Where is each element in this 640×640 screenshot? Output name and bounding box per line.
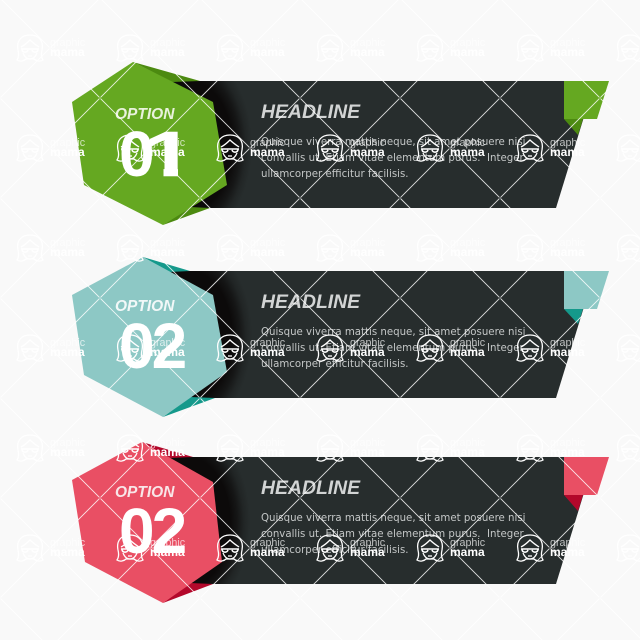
banner 3 bottom fold: [163, 583, 213, 603]
watermark overlay: graphic: [50, 137, 86, 149]
watermark overlay: mama: [50, 545, 85, 559]
banner 1 corner flag: [564, 81, 609, 119]
banner 2 number: 02: [119, 310, 186, 382]
banner 3: red option 02: [72, 442, 609, 603]
watermark overlay: mama: [350, 345, 385, 359]
banner 2 option label: OPTION: [115, 298, 175, 315]
banner 1 body text: convallis ut. Etiam vitae elementum purus. Integer: [261, 153, 524, 164]
banner 1 bottom fold: [163, 207, 210, 225]
banner 3 top fold: [142, 442, 193, 458]
watermark overlay: graphic: [550, 337, 586, 349]
banner 3 flag fold: [564, 495, 583, 511]
watermark overlay: graphic: [450, 237, 486, 249]
watermark overlay: mama: [350, 145, 385, 159]
watermark overlay: graphic: [450, 37, 486, 49]
watermark overlay: graphic: [50, 37, 86, 49]
watermark overlay: graphic: [250, 137, 286, 149]
watermark overlay: graphic: [350, 537, 386, 549]
banner 3 headline: HEADLINE: [261, 477, 361, 499]
watermark overlay: mama: [350, 545, 385, 559]
banner 1 body text: Quisque viverra mattis neque, sit amet posuere nisi: [261, 137, 525, 148]
banner 3 option label: OPTION: [115, 484, 175, 501]
watermark overlay: mama: [50, 445, 85, 459]
watermark overlay: mama: [250, 545, 285, 559]
watermark overlay: mama: [150, 145, 185, 159]
banner 1 flag fold: [564, 119, 583, 135]
watermark overlay: mama: [50, 45, 85, 59]
watermark overlay: mama: [350, 245, 385, 259]
watermark overlay: mama: [150, 545, 185, 559]
watermark overlay: mama: [450, 345, 485, 359]
watermark overlay: graphic: [450, 337, 486, 349]
watermark overlay: graphic: [150, 237, 186, 249]
banner 3 body text: Quisque viverra mattis neque, sit amet posuere nisi: [261, 513, 525, 524]
watermark overlay: mama: [550, 45, 585, 59]
banner 2: teal option 02: [72, 257, 609, 417]
watermark overlay: mama: [250, 445, 285, 459]
watermark overlay: mama: [250, 245, 285, 259]
watermark overlay: graphic: [150, 537, 186, 549]
banner 1 body text: [261, 137, 525, 180]
banner 1 dark panel: [170, 81, 595, 208]
banner 2 corner flag: [564, 271, 609, 309]
watermark overlay: mama: [50, 245, 85, 259]
banner 1 hexagon: [72, 62, 227, 225]
banner 1 hexagon shadow: [174, 81, 246, 208]
watermark overlay: graphic: [50, 237, 86, 249]
watermark overlay: mama: [250, 145, 285, 159]
watermark overlay: graphic: [350, 137, 386, 149]
watermark overlay: graphic: [350, 37, 386, 49]
watermark overlay: mama: [250, 345, 285, 359]
watermark overlay: graphic: [50, 537, 86, 549]
banner 1: green option 01: [72, 62, 609, 225]
watermark overlay: mama: [450, 145, 485, 159]
watermark overlay: mama: [550, 145, 585, 159]
watermark overlay: graphic: [450, 137, 486, 149]
watermark overlay: mama: [450, 445, 485, 459]
watermark overlay: graphic: [250, 37, 286, 49]
watermark overlay: graphic: [550, 137, 586, 149]
banner 3 number: 02: [119, 495, 186, 567]
watermark overlay: graphic: [50, 437, 86, 449]
watermark overlay: mama: [250, 45, 285, 59]
watermark overlay: mama: [550, 545, 585, 559]
watermark overlay: mama: [150, 245, 185, 259]
watermark overlay: mama: [450, 245, 485, 259]
watermark overlay: graphic: [450, 537, 486, 549]
watermark overlay: graphic: [350, 237, 386, 249]
watermark overlay: graphic: [250, 237, 286, 249]
watermark overlay: mama: [450, 545, 485, 559]
banner 3 body text: ullamcorper efficitur facilisis.: [261, 545, 408, 556]
banner 2 flag fold: [564, 309, 583, 324]
watermark overlay: mama: [50, 345, 85, 359]
watermark overlay: graphic: [50, 337, 86, 349]
banner 1 option label: OPTION: [115, 106, 175, 123]
banner 3 body text: convallis ut. Etiam vitae elementum purus. Integer: [261, 529, 524, 540]
infographic canvas: [72, 62, 609, 603]
watermark overlay: graphic: [550, 537, 586, 549]
watermark overlay: graphic: [350, 437, 386, 449]
watermark overlay: mama: [150, 445, 185, 459]
watermark overlay: graphic: [250, 437, 286, 449]
banner 3 hexagon shadow: [170, 457, 244, 584]
watermark overlay: mama: [350, 45, 385, 59]
watermark overlay: graphic: [250, 537, 286, 549]
watermark overlay: graphic: [550, 37, 586, 49]
banner 3 dark panel: [170, 457, 595, 584]
banner 2 body text: ullamcorper efficitur facilisis.: [261, 359, 408, 370]
banner 3 hexagon: [72, 442, 222, 603]
banner 3 body text: [261, 513, 525, 556]
watermark overlay: mama: [50, 145, 85, 159]
banner 2 bottom fold: [163, 397, 215, 417]
banner 2 top fold: [143, 257, 190, 272]
banner 1 headline: HEADLINE: [261, 101, 361, 123]
banner 2 headline: HEADLINE: [261, 291, 361, 313]
watermark overlay: graphic: [550, 437, 586, 449]
banner 2 hexagon shadow: [171, 271, 246, 398]
watermark overlay: mama: [550, 445, 585, 459]
banner 1 number: 1: [144, 119, 192, 190]
watermark overlay: mama: [150, 345, 185, 359]
watermark overlay: graphic: [550, 237, 586, 249]
watermark overlay: graphic: [150, 37, 186, 49]
watermark overlay: graphic: [250, 337, 286, 349]
banner 2 body text: [261, 327, 525, 370]
watermark overlay: mama: [350, 445, 385, 459]
banner 2 body text: convallis ut. Etiam vitae elementum purus. Integer: [261, 343, 524, 354]
watermark overlay: mama: [550, 245, 585, 259]
watermark overlay: graphic: [150, 337, 186, 349]
watermark overlay: graphic: [150, 437, 186, 449]
banner 1 top fold: [133, 62, 200, 82]
watermark overlay: mama: [450, 45, 485, 59]
watermark overlay: graphic: [450, 437, 486, 449]
watermark overlay: mama: [550, 345, 585, 359]
banner 1 body text: ullamcorper efficitur facilisis.: [261, 169, 408, 180]
watermark overlay: graphic: [150, 137, 186, 149]
banner 2 dark panel: [170, 271, 595, 398]
banner 2 body text: Quisque viverra mattis neque, sit amet posuere nisi: [261, 327, 525, 338]
banner 1 number: 0: [119, 118, 152, 190]
watermark overlay: mama: [150, 45, 185, 59]
watermark overlay: graphic: [350, 337, 386, 349]
banner 1 number: [122, 131, 178, 176]
banner 3 corner flag: [564, 457, 609, 495]
banner 2 hexagon: [72, 257, 227, 417]
